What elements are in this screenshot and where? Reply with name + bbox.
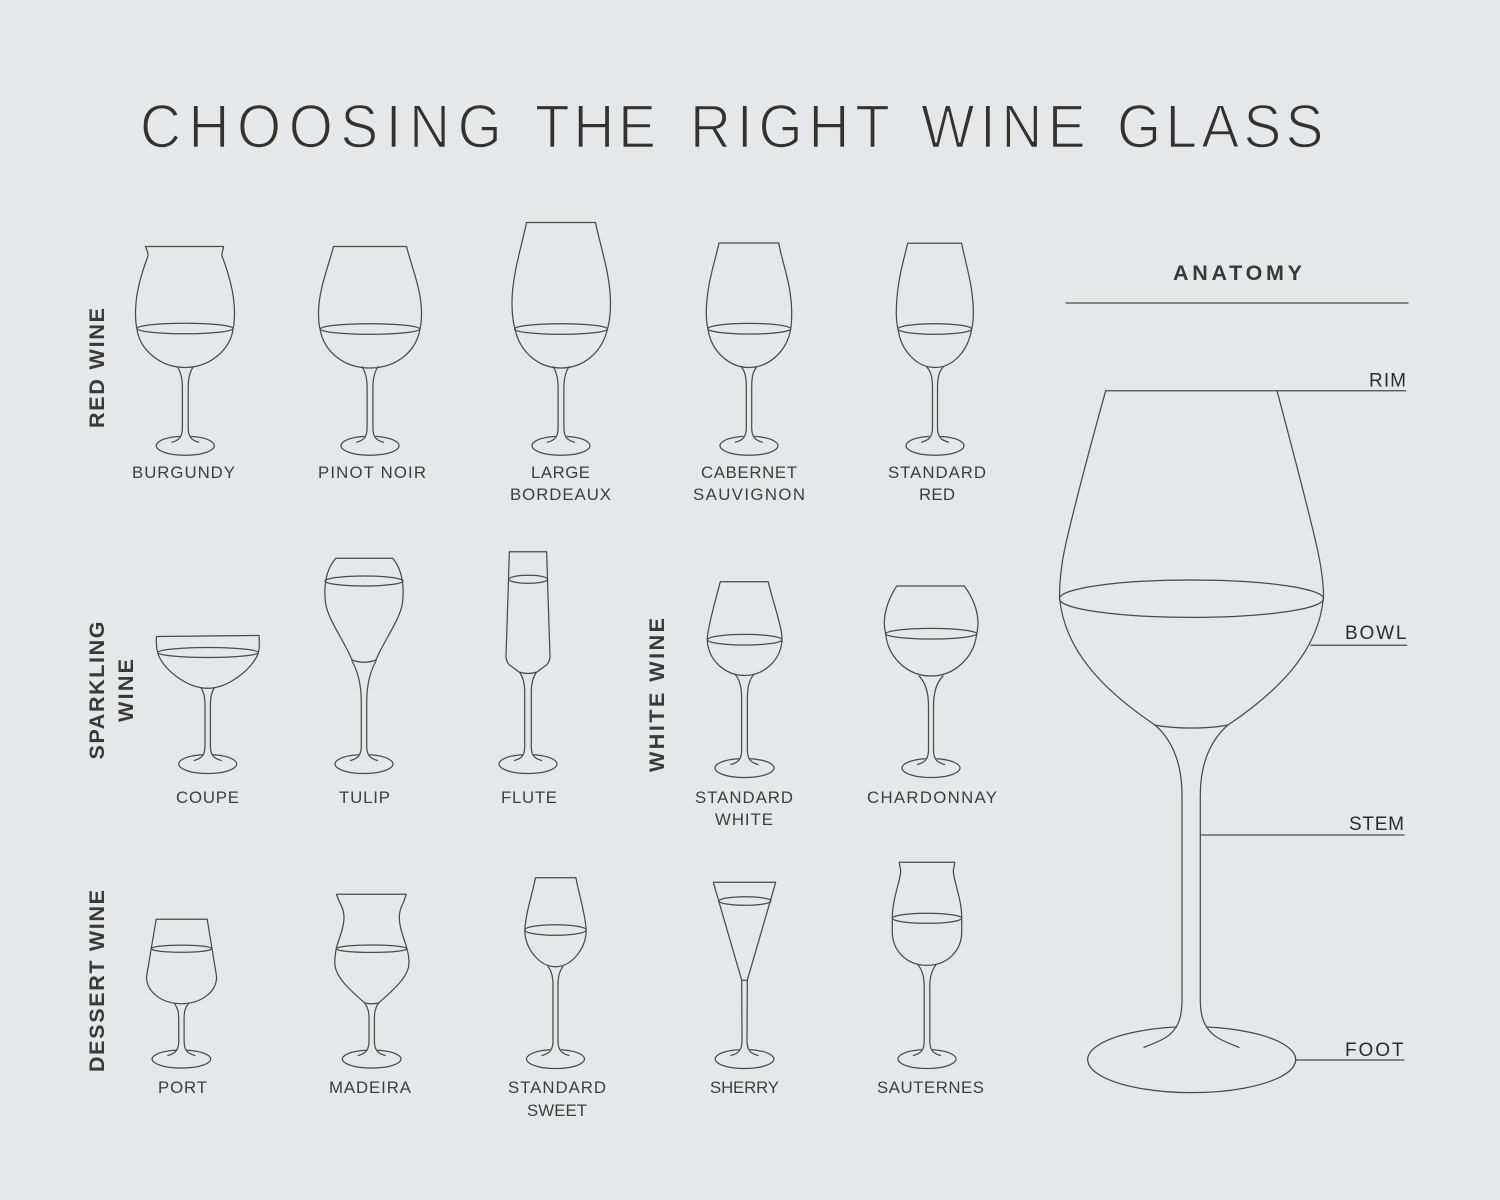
glass: standard sweet [525,878,586,1068]
anatomy heading: ANATOMY [1173,261,1302,285]
glass: port [146,919,217,1068]
glass: large bordeaux [512,222,610,455]
label: flute: FLUTE [501,788,557,807]
category label: sparkling wine [85,622,138,760]
label: standard red: STANDARD [888,463,986,482]
label: standard white [695,788,793,829]
label: standard red: RED [919,485,955,504]
anatomy foot [1088,1027,1296,1093]
glass: tulip [325,558,403,773]
anatomy wine surface [1059,580,1323,617]
title [140,94,1323,161]
label: pinot noir: PINOT NOIR [318,463,426,482]
title: CHOOSING [140,94,502,161]
label: sherry: SHERRY [710,1078,779,1097]
glass: sauternes [892,862,962,1068]
category label: white wine: WHITE WINE [645,618,669,772]
label: cabernet sauvignon: CABERNET [701,463,797,482]
label: madeira: MADEIRA [329,1078,412,1097]
callout: bowl: BOWL [1345,623,1406,644]
glass: flute [499,552,557,773]
label: coupe: COUPE [176,788,239,807]
glass: pinot noir [318,246,422,455]
label: cabernet sauvignon [693,463,805,504]
callout: stem: STEM [1349,814,1404,835]
glass: standard red [896,243,973,455]
glass: coupe [156,636,259,773]
label: standard sweet: SWEET [527,1101,587,1120]
callout: bowl [1311,623,1407,645]
label: large bordeaux [510,463,611,504]
title: GLASS [1117,94,1323,161]
label: large bordeaux: BORDEAUX [510,485,611,504]
callout: foot: FOOT [1345,1040,1404,1061]
label: standard sweet [508,1078,606,1120]
glass: madeira [335,894,409,1068]
anatomy stem [1144,725,1239,1047]
glass: standard white [707,582,782,778]
glass: cabernet sauvignon [706,243,792,455]
label: cabernet sauvignon: SAUVIGNON [693,485,805,504]
panel: white wine [645,582,997,829]
label: standard red [888,463,986,504]
title: WINE [921,94,1086,161]
callout: rim [1277,370,1406,392]
label: sauternes: SAUTERNES [877,1078,984,1097]
glass: sherry [713,882,776,1068]
label: standard white: STANDARD [695,788,793,807]
category label: red wine: RED WINE [85,308,109,428]
panel: sparkling wine [85,552,557,807]
category label: sparkling wine: WINE [114,659,138,722]
title: RIGHT [690,94,890,161]
glass: chardonnay [884,586,978,777]
label: port: PORT [158,1078,207,1097]
anatomy glass bowl [1060,391,1324,728]
title: THE [535,94,656,161]
panel: red wine [85,222,986,504]
label: standard sweet: STANDARD [508,1078,606,1097]
callout: rim: RIM [1369,370,1406,392]
label: tulip: TULIP [339,788,390,807]
panel: anatomy [1059,261,1408,1093]
glass: burgundy [136,246,234,455]
label: burgundy: BURGUNDY [132,463,235,482]
label: large bordeaux: LARGE [531,463,590,482]
category label: dessert wine: DESSERT WINE [85,890,109,1072]
label: chardonnay: CHARDONNAY [867,788,997,807]
category label: sparkling wine: SPARKLING [85,622,109,760]
callout: foot [1295,1040,1404,1061]
panel: dessert wine [85,862,984,1120]
label: standard white: WHITE [715,810,773,829]
